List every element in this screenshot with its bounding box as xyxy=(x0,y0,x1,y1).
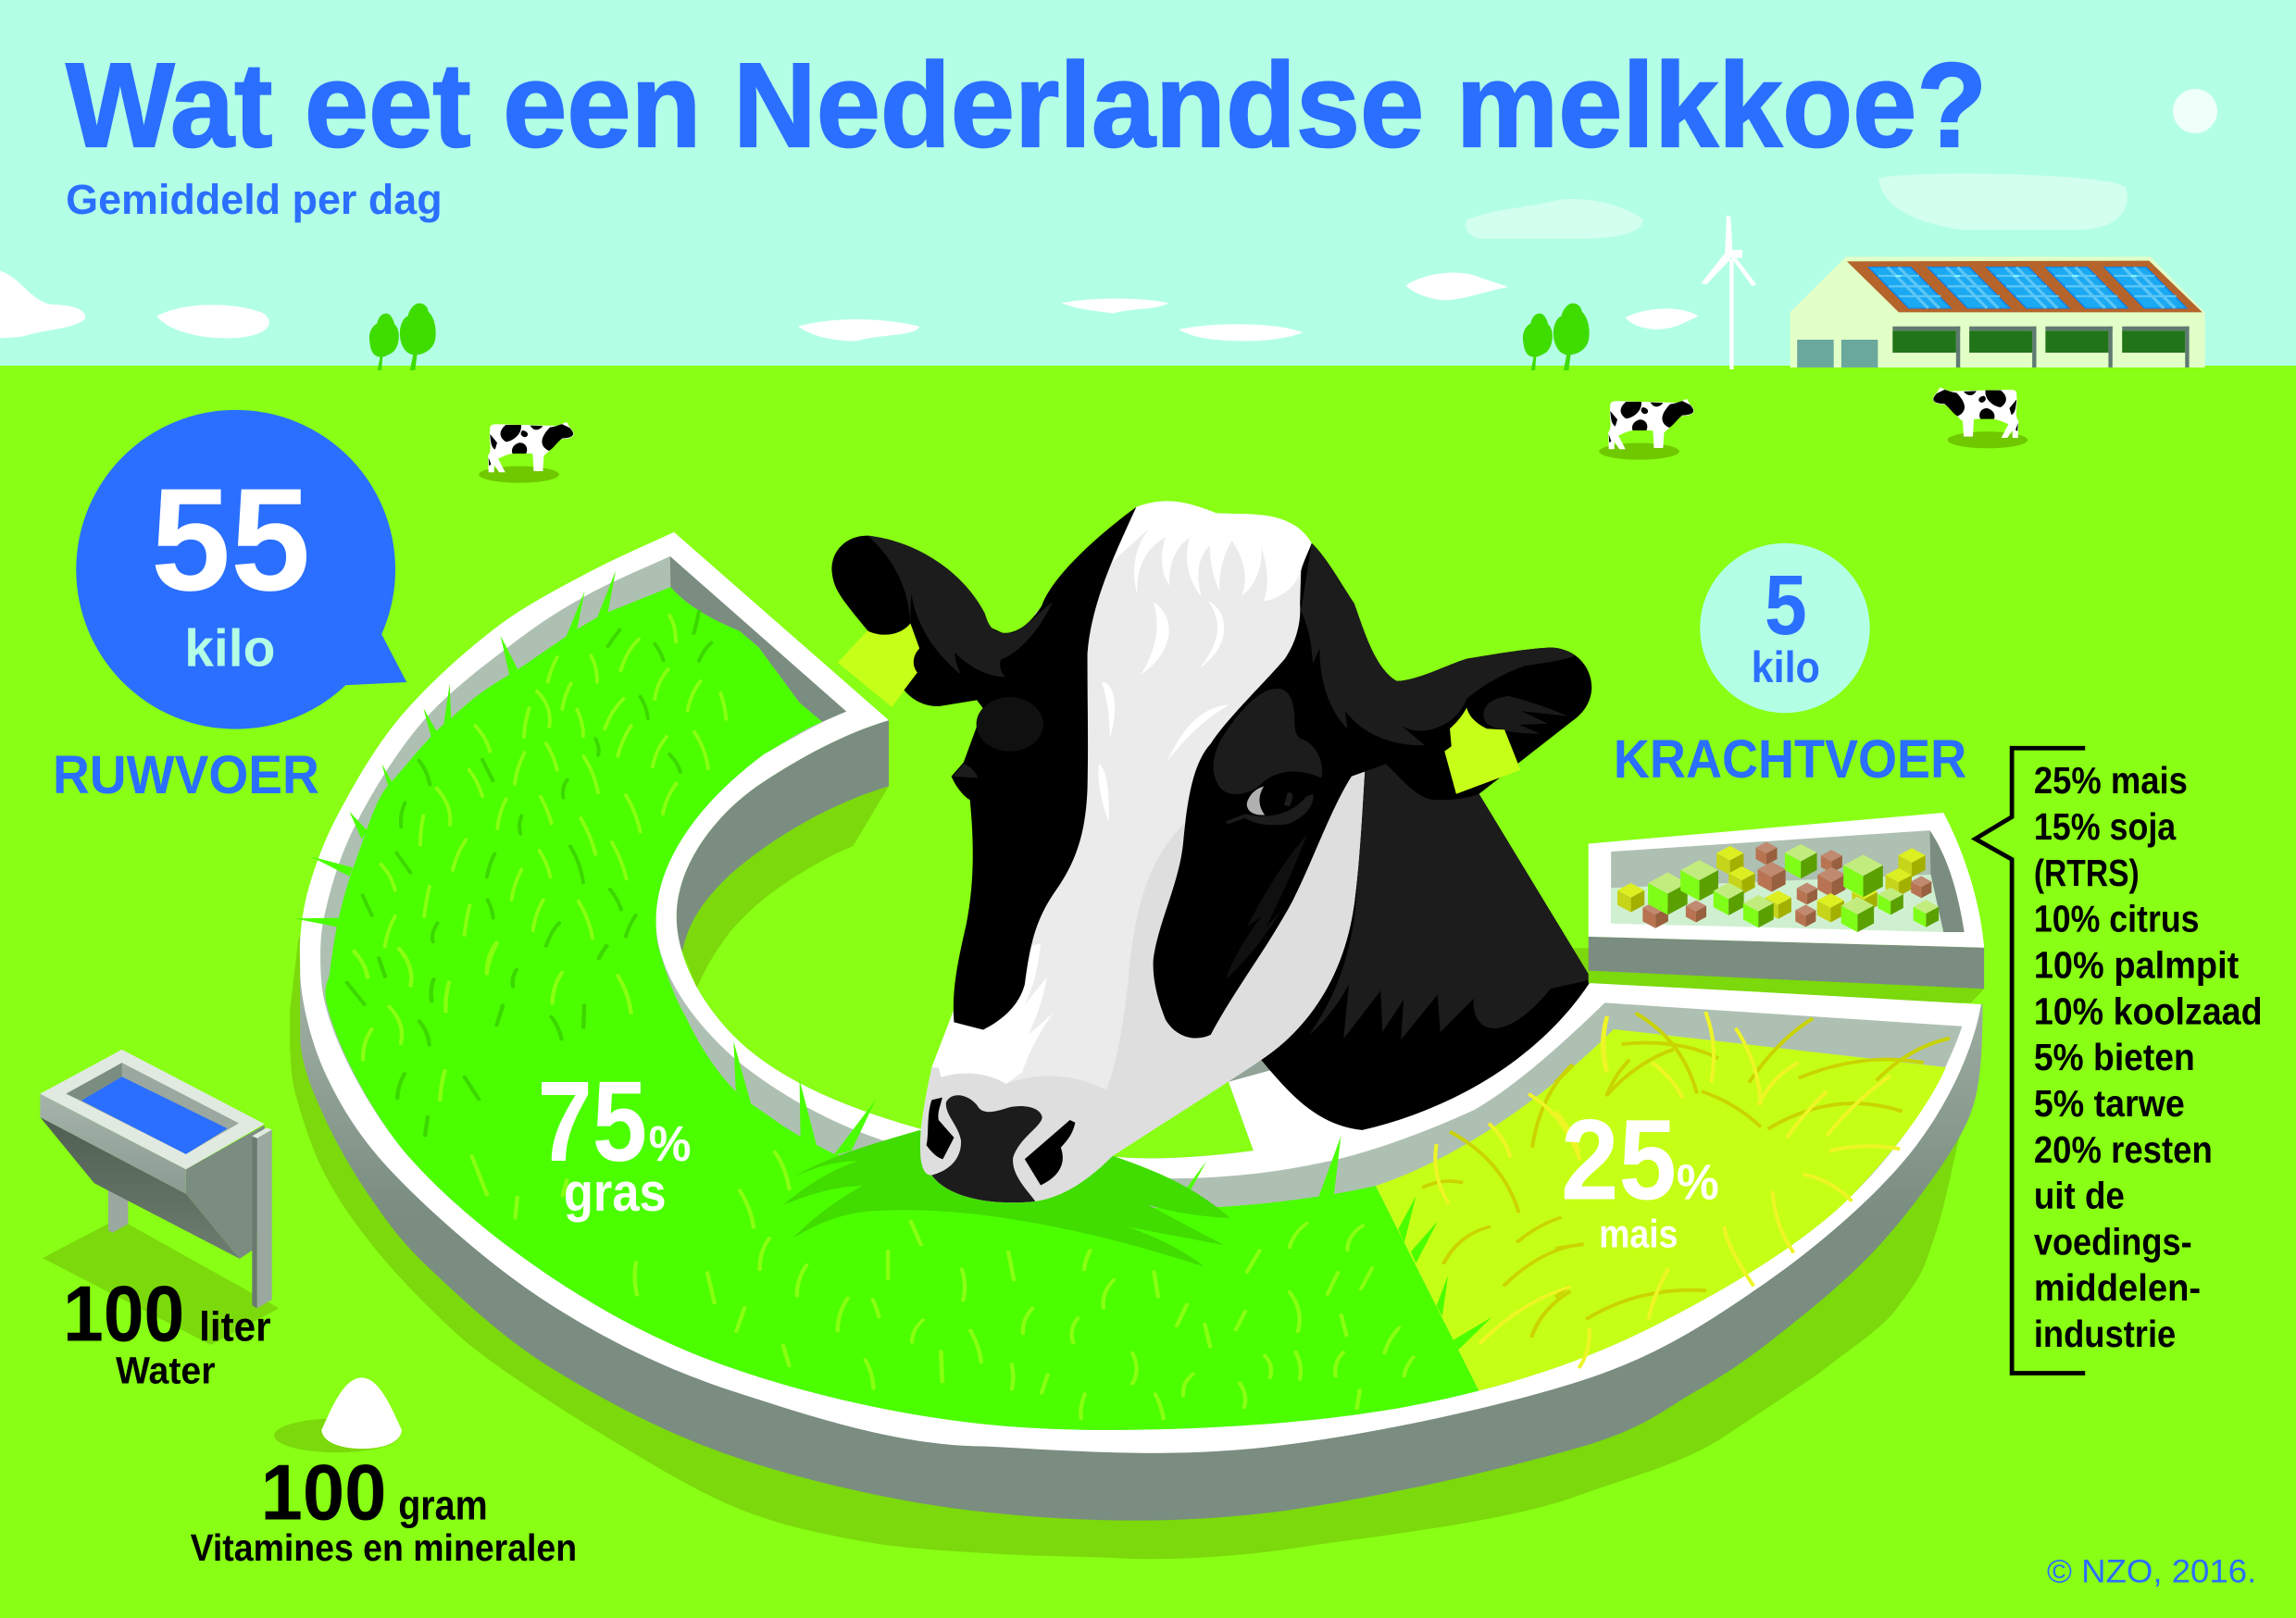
vitamins amount: gram xyxy=(398,1481,488,1529)
left ear tag xyxy=(838,623,919,707)
tray side wall xyxy=(1929,830,1965,932)
forehead highlights xyxy=(1098,601,1229,822)
title: Wat eet een Nederlandse melkkoe? xyxy=(66,39,1987,172)
label: 25% mais: mais xyxy=(1599,1213,1678,1257)
ring ground shadow xyxy=(290,937,1962,1559)
icon: water trough xyxy=(40,1050,279,1345)
bubble unit: kilo xyxy=(184,619,275,678)
right black patch xyxy=(1154,543,1591,1039)
krachtvoer ingredient list xyxy=(2034,759,2263,1355)
label: 75% gras xyxy=(537,1058,692,1223)
temple spot xyxy=(977,697,1043,752)
grass strokes lower left xyxy=(347,942,942,1388)
tray rim xyxy=(1589,813,1984,948)
label: 25% mais: % xyxy=(1677,1154,1719,1210)
krachtvoer ingredient list: industrie xyxy=(2034,1313,2176,1355)
straw right dark xyxy=(1555,1014,1950,1319)
nose xyxy=(931,1095,1042,1202)
neck xyxy=(1261,764,1591,1130)
tray floor xyxy=(1611,875,1943,932)
farm with wind turbine, trees and barn xyxy=(1523,216,2205,460)
krachtvoer ingredient list: middelen- xyxy=(2034,1266,2201,1309)
cow head xyxy=(831,501,1591,1202)
straw left dark xyxy=(1422,1060,1629,1213)
right ear tag xyxy=(1444,707,1520,794)
centre hole shadow xyxy=(682,786,889,989)
circle shape xyxy=(1700,543,1870,713)
icon: trees left xyxy=(369,304,436,370)
krachtvoer ingredient list: 10% palmpit xyxy=(2034,944,2240,987)
vitamins amount xyxy=(191,1450,577,1569)
muzzle white patch xyxy=(931,943,1054,1084)
cheek and muzzle grey xyxy=(920,770,1365,1202)
label: 75% gras: 75 xyxy=(537,1058,647,1186)
grass tuft under nose xyxy=(783,1130,1230,1266)
water amount: liter xyxy=(199,1305,271,1350)
lower left light strokes xyxy=(354,942,942,1388)
sky background xyxy=(0,0,2296,367)
water amount xyxy=(63,1271,271,1392)
icon: wind turbine xyxy=(1702,216,1756,369)
grass blades inner rim xyxy=(733,1041,1492,1350)
left ear tip xyxy=(831,536,910,635)
ruwvoer bubble xyxy=(76,410,406,729)
forehead white xyxy=(1113,501,1312,601)
mais section 25% xyxy=(1376,1029,1946,1391)
krachtvoer tray xyxy=(1589,813,1984,1003)
brow patch xyxy=(1214,689,1322,794)
subtitle: Gemiddeld per dag xyxy=(66,175,443,223)
clouds xyxy=(0,174,2128,342)
cheek streak xyxy=(1226,834,1307,979)
straw lower dark xyxy=(1443,1217,1574,1338)
straw left light xyxy=(1435,1017,1606,1204)
tray shadow xyxy=(1589,971,1984,1003)
icon: small cow right xyxy=(1933,388,2028,448)
krachtvoer ingredient list: 5% bieten xyxy=(2034,1036,2195,1078)
krachtvoer circle xyxy=(1700,543,1870,713)
grass field background xyxy=(0,366,2296,1618)
grass blades upper rim xyxy=(293,571,616,927)
ring inner wall xyxy=(320,556,1962,1430)
krachtvoer ingredient list: 5% tarwe xyxy=(2034,1082,2185,1125)
straw right light xyxy=(1555,1012,1900,1368)
bracket callout xyxy=(1976,748,2085,1374)
icon: barn with solar panels xyxy=(1790,256,2205,367)
neck dark fur xyxy=(1309,764,1591,1039)
bubble shape xyxy=(76,410,406,729)
nostrils xyxy=(927,1098,1075,1185)
far eye xyxy=(953,764,978,778)
grass strokes upper part xyxy=(355,612,726,978)
straw strokes xyxy=(1422,1012,1950,1368)
label: 75% gras: % xyxy=(649,1116,692,1172)
head base xyxy=(920,501,1365,1202)
icon: small cow left xyxy=(479,422,574,483)
label: 75% gras: gras xyxy=(564,1163,667,1223)
feed cubes xyxy=(1617,842,1939,932)
krachtvoer ingredient list: 10% koolzaad xyxy=(2034,989,2263,1032)
ring white rim xyxy=(300,532,1981,1453)
copyright: © NZO, 2016. xyxy=(2047,1555,2256,1590)
icon: vitamin pile xyxy=(274,1377,402,1452)
krachtvoer ingredient list: 15% soja xyxy=(2034,805,2177,848)
vitamins amount: 100 xyxy=(261,1450,387,1537)
grass section 75% xyxy=(325,587,1479,1430)
tray front wall xyxy=(1589,937,1984,989)
label: 25% mais xyxy=(1561,1096,1719,1257)
icon: trees right xyxy=(1523,304,1590,370)
centre hole ground xyxy=(677,720,1317,1158)
krachtvoer ingredient list: voedings- xyxy=(2034,1220,2192,1263)
bubble number: 55 xyxy=(151,457,310,621)
water amount: Water xyxy=(116,1350,215,1392)
krachtvoer ingredient list: (RTRS) xyxy=(2034,852,2140,894)
icon: sun xyxy=(2173,89,2217,133)
heading krachtvoer: KRACHTVOER xyxy=(1614,729,1966,790)
lower left dark strokes xyxy=(347,946,606,1136)
right ear inner xyxy=(1483,696,1567,734)
left ear dark fur xyxy=(867,536,1053,677)
label: 25% mais: 25 xyxy=(1561,1096,1677,1224)
krachtvoer ingredient list: uit de xyxy=(2034,1175,2125,1217)
light strokes xyxy=(355,616,726,978)
grass strokes lower right xyxy=(942,1224,1414,1419)
circle number: 5 xyxy=(1765,558,1807,653)
icon: small cow middle xyxy=(1599,399,1694,460)
notch dark wall xyxy=(670,556,846,722)
foreground of ring xyxy=(537,1041,1719,1350)
water amount: 100 xyxy=(63,1271,184,1359)
straw lower light xyxy=(1479,1287,1570,1344)
krachtvoer ingredient list: 25% mais xyxy=(2034,759,2188,802)
circle unit: kilo xyxy=(1752,643,1820,692)
cow eye xyxy=(1226,787,1314,825)
vitamins amount: Vitamines en mineralen xyxy=(191,1526,577,1569)
dark strokes xyxy=(363,612,711,977)
right ear dark fur xyxy=(1301,543,1575,745)
krachtvoer ingredient list: 20% resten xyxy=(2034,1128,2213,1171)
krachtvoer ingredient list: 10% citrus xyxy=(2034,898,2200,940)
tray back wall xyxy=(1611,830,1965,932)
ring outer wall xyxy=(300,937,1982,1521)
left black patch xyxy=(905,507,1136,1029)
heading ruwvoer: RUWVOER xyxy=(53,745,319,805)
feed ring chart xyxy=(290,532,1982,1559)
centre hole wall xyxy=(677,720,889,952)
